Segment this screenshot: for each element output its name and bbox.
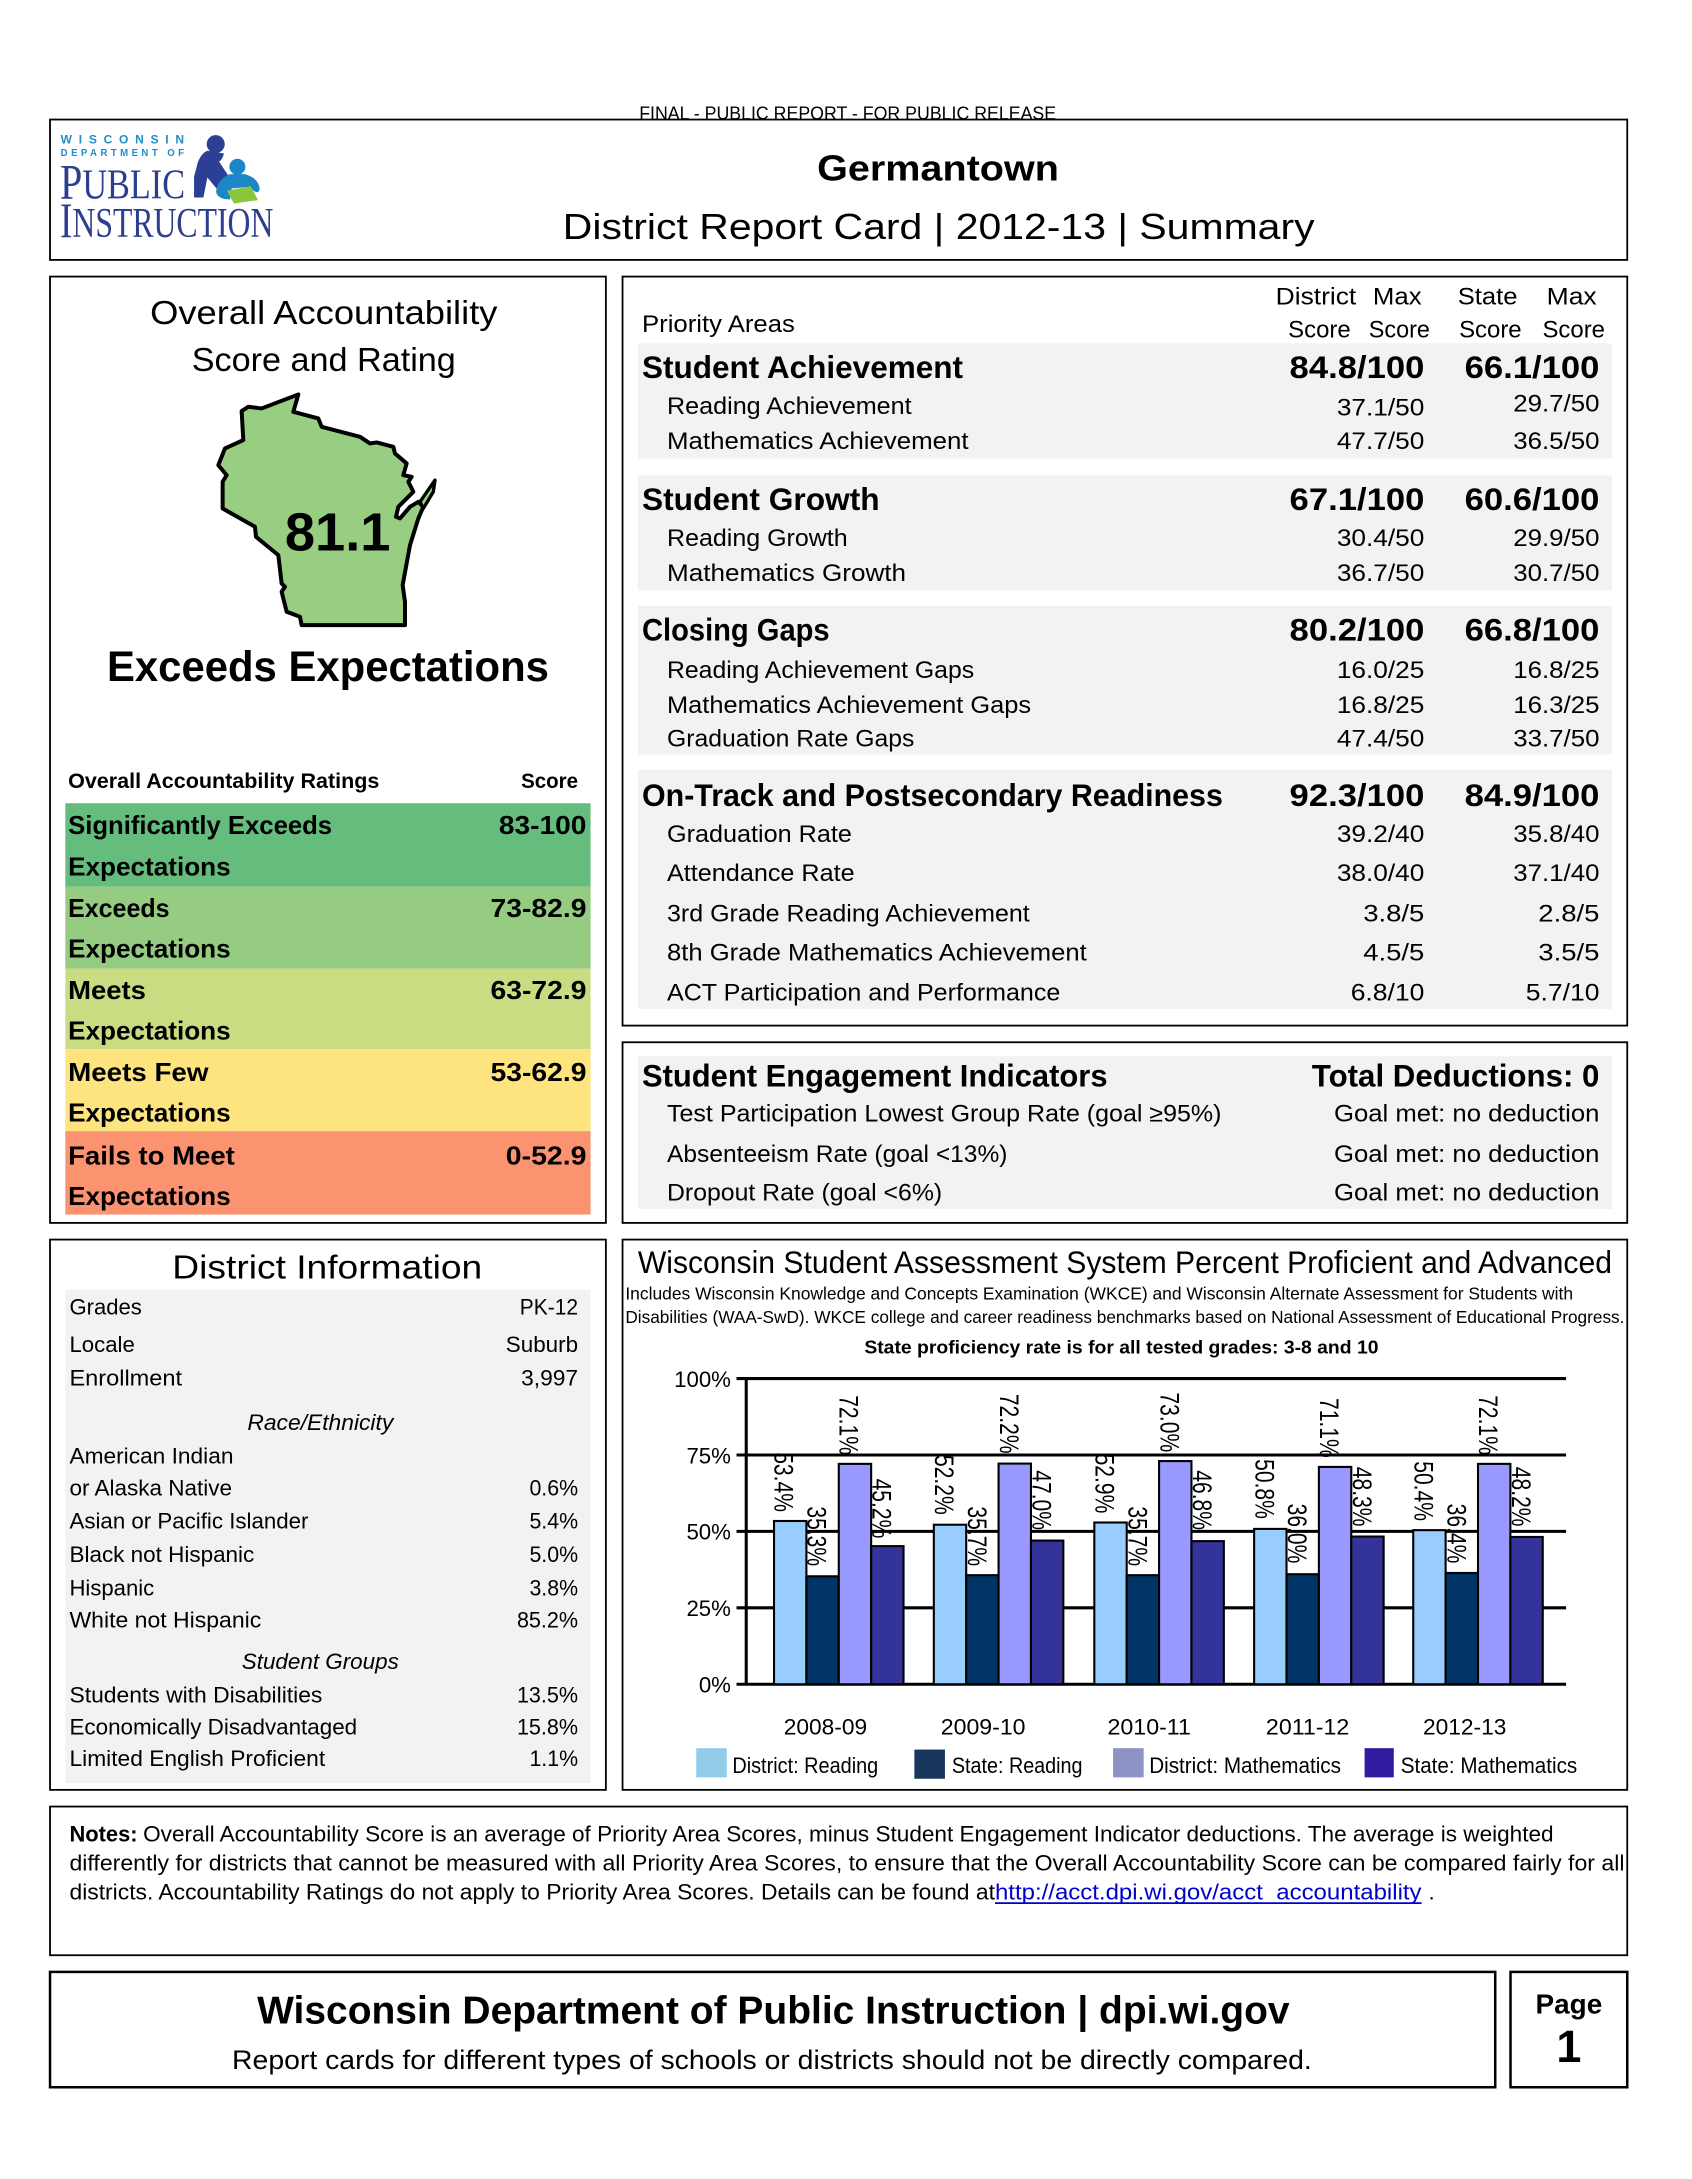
band: meets: Meets — [68, 977, 146, 1005]
heading: overall accountability: Overall Accountability — [150, 295, 498, 332]
panel: district information: Grades — [69, 1295, 142, 1320]
section: closing gaps: Reading Achievement Gaps — [667, 658, 974, 684]
panel: district information: PK-12 — [520, 1295, 578, 1320]
panel: notes: Notes: — [69, 1821, 138, 1846]
panel: district information: 3,997 — [521, 1365, 578, 1390]
panel: district information: Race/Ethnicity — [247, 1410, 395, 1435]
value labels: 52.2% — [929, 1455, 959, 1515]
panel: student engagement indicators: Dropout Rate (goal <6%) — [667, 1181, 942, 1207]
axis labels: 25% — [686, 1596, 731, 1621]
logo: Wisconsin DPI: INSTRUCTION — [60, 192, 273, 248]
section: closing gaps: Graduation Rate Gaps — [667, 726, 914, 752]
section: on-track and postsecondary readiness: 35.8/40 — [1513, 822, 1599, 848]
year labels — [784, 1714, 1506, 1739]
section: on-track and postsecondary readiness: 3rd Grade Reading Achievement — [667, 901, 1030, 927]
panel: district information: Enrollment — [69, 1365, 183, 1390]
year labels: 2011-12 — [1266, 1714, 1349, 1739]
section: on-track and postsecondary readiness: 3.8/5 — [1363, 901, 1424, 927]
section: student achievement: Reading Achievement — [667, 394, 912, 420]
panel: assessment chart — [623, 1240, 1627, 1790]
panel: district information — [50, 1240, 606, 1790]
panel: district information: Limited English Proficient — [69, 1746, 326, 1771]
value labels: 35.7% — [1122, 1506, 1152, 1566]
rating: exceeds expectations: Exceeds Expectations — [107, 643, 549, 691]
panel: notes: Overall Accountability Score is an average of Priority Area Scores, minus Student Engagement Indicator deductions. The average is weighted — [143, 1821, 1554, 1846]
value labels: 36.0% — [1282, 1504, 1312, 1563]
value labels: 73.0% — [1154, 1392, 1184, 1452]
band: significantly exceeds: Significantly Exceeds — [68, 812, 332, 840]
section: student achievement: 47.7/50 — [1337, 429, 1424, 455]
column headers: Max — [1547, 284, 1597, 310]
panel: district information: White not Hispanic — [69, 1607, 261, 1632]
band: fails to meet: Fails to Meet — [68, 1143, 235, 1171]
value labels: 35.7% — [962, 1506, 992, 1566]
value labels: 71.1% — [1314, 1398, 1344, 1458]
chart title: Wisconsin Student Assessment System Percent Proficient and Advanced — [638, 1245, 1612, 1280]
section: closing gaps: 16.8/25 — [1337, 693, 1424, 719]
column headers: Max — [1373, 284, 1422, 310]
band: meets few — [65, 1049, 591, 1131]
panel: footer — [50, 1972, 1495, 2087]
band: exceeds: Expectations — [68, 935, 231, 963]
section: closing gaps: Mathematics Achievement Gaps — [667, 693, 1031, 719]
band: exceeds: Exceeds — [68, 895, 170, 923]
logo: Wisconsin DPI: WISCONSIN — [61, 132, 184, 146]
chart subtitle: Disabilities (WAA-SwD). WKCE college and career readiness benchmarks based on National Assessment of Educational Progress. — [625, 1307, 1624, 1327]
panel: district information: 15.8% — [517, 1714, 578, 1739]
panel: page number — [1511, 1972, 1627, 2087]
panel: student engagement indicators: Absenteeism Rate (goal <13%) — [667, 1142, 1007, 1168]
section: student growth: 36.7/50 — [1337, 561, 1424, 587]
section: on-track and postsecondary readiness: 37.1/40 — [1513, 861, 1599, 887]
panel: student engagement indicators: Total Deductions: 0 — [1312, 1059, 1599, 1094]
panel: district information: 5.0% — [529, 1542, 578, 1567]
section: closing gaps: 80.2/100 — [1290, 613, 1424, 648]
panel: footer: Report cards for different types of schools or districts should not be directly compared. — [232, 2045, 1312, 2075]
panel: district information: 3.8% — [529, 1575, 578, 1600]
band: fails to meet: 0-52.9 — [506, 1143, 586, 1171]
section: student achievement: 36.5/50 — [1513, 429, 1599, 455]
panel: district information: Asian or Pacific Islander — [69, 1509, 309, 1534]
panel: district information: 5.4% — [529, 1509, 578, 1534]
year labels: 2012-13 — [1423, 1714, 1506, 1739]
bars: 2011-12 — [1254, 1467, 1384, 1684]
band: exceeds: 73-82.9 — [491, 895, 586, 923]
section: student growth: 30.7/50 — [1513, 561, 1599, 587]
section: closing gaps: Closing Gaps — [642, 613, 830, 648]
value labels: 50.4% — [1409, 1461, 1439, 1521]
section: on-track and postsecondary readiness: 84.9/100 — [1465, 778, 1599, 813]
panel: student engagement indicators: Goal met: no deduction — [1334, 1101, 1599, 1127]
gridlines and axis — [736, 1379, 1566, 1684]
band: significantly exceeds: Expectations — [68, 853, 231, 881]
value labels: 72.1% — [1473, 1395, 1503, 1455]
panel: notes — [50, 1807, 1627, 1955]
release banner: FINAL - PUBLIC REPORT - FOR PUBLIC RELEASE — [639, 103, 1056, 124]
legend: State: Mathematics — [1401, 1753, 1577, 1778]
section: student growth: 60.6/100 — [1465, 482, 1599, 517]
panel: overall accountability score and rating — [50, 277, 606, 1223]
bars: 2010-11 — [1094, 1461, 1224, 1684]
section: student achievement: 66.1/100 — [1465, 350, 1599, 385]
section: on-track and postsecondary readiness: 5.7/10 — [1526, 981, 1599, 1007]
year labels: 2008-09 — [784, 1714, 867, 1739]
column headers: Score — [1369, 318, 1430, 344]
panel: district information: 0.6% — [529, 1475, 578, 1500]
column headers: District — [1276, 284, 1357, 310]
value labels: 52.9% — [1090, 1454, 1120, 1513]
value labels: 53.4% — [769, 1452, 799, 1512]
chart subtitle: State proficiency rate is for all tested grades: 3-8 and 10 — [864, 1337, 1379, 1358]
panel: district information: 85.2% — [517, 1607, 578, 1632]
band: meets few: 53-62.9 — [491, 1059, 586, 1087]
panel: student engagement indicators — [623, 1042, 1627, 1223]
value labels: 45.2% — [867, 1479, 897, 1538]
panel: header — [50, 120, 1627, 260]
panel: footer: Wisconsin Department of Public Instruction | dpi.wi.gov — [257, 1989, 1290, 2032]
logo: Wisconsin DPI — [60, 132, 273, 248]
section: student achievement: 84.8/100 — [1290, 350, 1424, 385]
band: meets few: Expectations — [68, 1099, 231, 1127]
chart subtitle: Includes Wisconsin Knowledge and Concepts Examination (WKCE) and Wisconsin Alternate Assessment for Students with — [625, 1283, 1573, 1303]
heading: overall accountability — [150, 295, 498, 379]
panel: page number: Page — [1536, 1989, 1602, 2020]
panel: district information: or Alaska Native — [69, 1475, 232, 1500]
section: closing gaps: 16.8/25 — [1513, 658, 1599, 684]
ratings table: Overall Accountability Ratings — [68, 769, 379, 793]
section: student growth — [638, 475, 1612, 591]
heading: overall accountability: Score and Rating — [192, 342, 456, 379]
title: report name: District Report Card | 2012-13 | Summary — [563, 206, 1315, 247]
logo: Wisconsin DPI: DEPARTMENT OF — [61, 148, 184, 159]
section: on-track and postsecondary readiness: 4.5/5 — [1363, 940, 1424, 966]
section: student growth: Reading Growth — [667, 526, 848, 552]
section: closing gaps: 16.0/25 — [1337, 658, 1424, 684]
column headers: Score — [1459, 318, 1522, 344]
panel: student engagement indicators: Goal met: no deduction — [1334, 1181, 1599, 1207]
panel: notes: districts. Accountability Ratings do not apply to Priority Area Scores. Details can be found at — [69, 1880, 996, 1905]
ratings table: Score — [521, 769, 578, 793]
axis labels: 0% — [699, 1673, 731, 1698]
section: closing gaps: 47.4/50 — [1337, 726, 1424, 752]
band: meets — [65, 969, 591, 1049]
value labels: 47.0% — [1026, 1470, 1056, 1530]
section: on-track and postsecondary readiness: 92.3/100 — [1290, 778, 1424, 813]
icon: Wisconsin map with score: 81.1 — [285, 502, 390, 562]
section: closing gaps — [638, 606, 1612, 755]
section: student growth: 30.4/50 — [1337, 526, 1424, 552]
band: significantly exceeds: 83-100 — [499, 812, 586, 840]
axis labels: 75% — [686, 1443, 731, 1468]
panel: district information: Hispanic — [69, 1575, 154, 1600]
band: meets: 63-72.9 — [491, 977, 586, 1005]
value labels: 36.4% — [1441, 1504, 1471, 1563]
bar chart — [674, 1367, 1566, 1739]
band: exceeds — [65, 887, 591, 969]
panel: page number: 1 — [1556, 2020, 1581, 2072]
value labels: 48.3% — [1347, 1467, 1377, 1527]
icon: Wisconsin map with score — [218, 394, 435, 625]
panel: district information: Suburb — [506, 1332, 578, 1357]
panel: district information: District Information — [172, 1249, 482, 1286]
section: on-track and postsecondary readiness: Attendance Rate — [667, 861, 855, 887]
band: significantly exceeds — [65, 803, 591, 887]
section: on-track and postsecondary readiness: On-Track and Postsecondary Readiness — [642, 778, 1223, 813]
column headers: Score — [1288, 318, 1351, 344]
section: student achievement: Mathematics Achievement — [667, 429, 969, 455]
section: student growth: 29.9/50 — [1513, 526, 1599, 552]
section: student achievement: 37.1/50 — [1337, 396, 1424, 422]
section: closing gaps: 16.3/25 — [1513, 693, 1599, 719]
bars: 2009-10 — [934, 1464, 1063, 1684]
axis labels: 50% — [686, 1520, 731, 1545]
panel: district information: 13.5% — [517, 1682, 578, 1707]
column headers: State — [1458, 284, 1517, 310]
value labels: 35.3% — [801, 1506, 831, 1566]
chart subtitle — [625, 1283, 1624, 1358]
panel: notes: http://acct.dpi.wi.gov/acct_accountability — [995, 1880, 1423, 1905]
section: on-track and postsecondary readiness: 3.5/5 — [1538, 940, 1599, 966]
title: district name: Germantown — [817, 148, 1059, 189]
panel: student engagement indicators: Student Engagement Indicators — [642, 1059, 1108, 1094]
legend: District: Mathematics — [1149, 1753, 1341, 1778]
section: student achievement — [638, 343, 1612, 459]
value labels: 72.2% — [994, 1394, 1024, 1454]
section: student growth: 67.1/100 — [1290, 482, 1424, 517]
section: student achievement: Student Achievement — [642, 350, 964, 385]
section: on-track and postsecondary readiness: ACT Participation and Performance — [667, 981, 1060, 1007]
panel: district information: 1.1% — [529, 1746, 578, 1771]
section: closing gaps: 66.8/100 — [1465, 613, 1599, 648]
section: closing gaps: 33.7/50 — [1513, 726, 1599, 752]
panel: district information: Black not Hispanic — [69, 1542, 254, 1567]
section: on-track and postsecondary readiness — [638, 770, 1612, 1009]
axis labels: 100% — [674, 1367, 731, 1392]
panel: district information: American Indian — [69, 1443, 233, 1468]
section: on-track and postsecondary readiness: 2.8/5 — [1538, 901, 1599, 927]
value labels — [769, 1392, 1536, 1566]
section: on-track and postsecondary readiness: 6.8/10 — [1351, 981, 1424, 1007]
logo: Wisconsin DPI: PUBLIC — [60, 153, 185, 209]
band: fails to meet: Expectations — [68, 1183, 231, 1211]
section: on-track and postsecondary readiness: 39.2/40 — [1337, 822, 1424, 848]
section: on-track and postsecondary readiness: 8th Grade Mathematics Achievement — [667, 940, 1087, 966]
column headers: Priority Areas — [642, 312, 795, 338]
section: student growth: Mathematics Growth — [667, 561, 906, 587]
section: on-track and postsecondary readiness: Graduation Rate — [667, 822, 852, 848]
bars: 2012-13 — [1413, 1464, 1543, 1684]
panel: notes: differently for districts that cannot be measured with all Priority Area Scores, to ensure that the Overall Accountability Score can be compared fairly for all — [69, 1850, 1624, 1875]
panel: district information: Students with Disabilities — [69, 1682, 322, 1707]
axis labels — [674, 1367, 731, 1698]
value labels: 48.2% — [1506, 1467, 1536, 1527]
section: student achievement: 29.7/50 — [1513, 391, 1599, 417]
panel: district information: Locale — [69, 1332, 135, 1357]
value labels: 72.1% — [833, 1395, 863, 1455]
panel: student engagement indicators: Test Participation Lowest Group Rate (goal ≥95%) — [667, 1101, 1221, 1127]
panel: priority areas — [623, 277, 1627, 1026]
panel: notes: . — [1429, 1880, 1435, 1905]
legend — [696, 1748, 1577, 1779]
band: fails to meet — [65, 1131, 591, 1215]
year labels: 2009-10 — [941, 1714, 1026, 1739]
band: meets few: Meets Few — [68, 1059, 210, 1087]
column headers: Score — [1542, 318, 1605, 344]
section: on-track and postsecondary readiness: 38.0/40 — [1337, 861, 1424, 887]
value labels: 50.8% — [1250, 1459, 1280, 1519]
ratings table — [65, 769, 591, 1215]
band: meets: Expectations — [68, 1017, 231, 1045]
bars: 2008-09 — [774, 1464, 904, 1684]
value labels: 46.8% — [1187, 1470, 1217, 1530]
section: student growth: Student Growth — [642, 482, 880, 517]
legend: State: Reading — [952, 1753, 1083, 1778]
column headers — [642, 284, 1605, 344]
year labels: 2010-11 — [1108, 1714, 1191, 1739]
legend: District: Reading — [732, 1753, 878, 1778]
panel: district information: Economically Disadvantaged — [69, 1714, 357, 1739]
panel: student engagement indicators: Goal met: no deduction — [1334, 1142, 1599, 1168]
panel: district information: Student Groups — [242, 1649, 399, 1674]
